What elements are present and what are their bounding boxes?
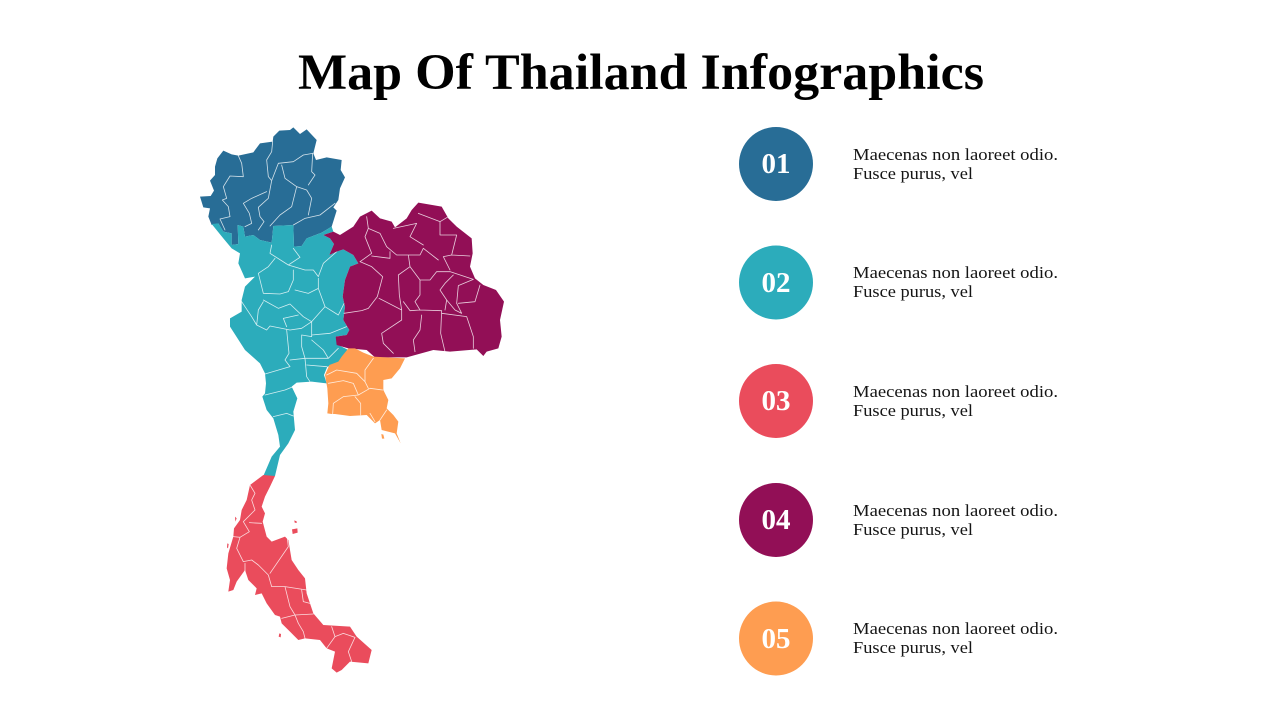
text 04 [853, 501, 1058, 539]
region: south (red) [227, 475, 372, 673]
text 01 [853, 145, 1058, 183]
text 02: Fusce purus, vel [853, 282, 973, 301]
text 03: Fusce purus, vel [853, 401, 973, 420]
text 05: Maecenas non laoreet odio. [853, 619, 1058, 638]
text 04: Maecenas non laoreet odio. [853, 501, 1058, 520]
region: southeast (orange) [325, 348, 405, 443]
text 01: Fusce purus, vel [853, 164, 973, 183]
badge 04: 04 [762, 504, 790, 536]
item 04 [739, 483, 1058, 557]
text 05: Fusce purus, vel [853, 638, 973, 657]
badge 04 [739, 483, 813, 557]
text 04: Fusce purus, vel [853, 520, 973, 539]
item 01 [739, 127, 1058, 201]
item 05 [739, 602, 1058, 676]
badge 03: 03 [762, 385, 790, 417]
item 02 [739, 246, 1058, 320]
badge 02 [739, 246, 813, 320]
text 03: Maecenas non laoreet odio. [853, 382, 1058, 401]
badge 03 [739, 364, 813, 438]
text 03 [853, 382, 1058, 420]
item 03 [739, 364, 1058, 438]
text 02: Maecenas non laoreet odio. [853, 263, 1058, 282]
region: central (teal) [212, 223, 358, 476]
region: north (blue) [200, 127, 345, 247]
badge 05 [739, 602, 813, 676]
map of Thailand [200, 127, 504, 673]
text 01: Maecenas non laoreet odio. [853, 145, 1058, 164]
region: east (purple) [323, 203, 504, 357]
title: Map Of Thailand Infographics [298, 45, 984, 101]
badge 02: 02 [762, 267, 790, 299]
badge 01 [739, 127, 813, 201]
text 02 [853, 263, 1058, 301]
text 05 [853, 619, 1058, 657]
badge 05: 05 [762, 623, 790, 655]
badge 01: 01 [762, 148, 790, 180]
